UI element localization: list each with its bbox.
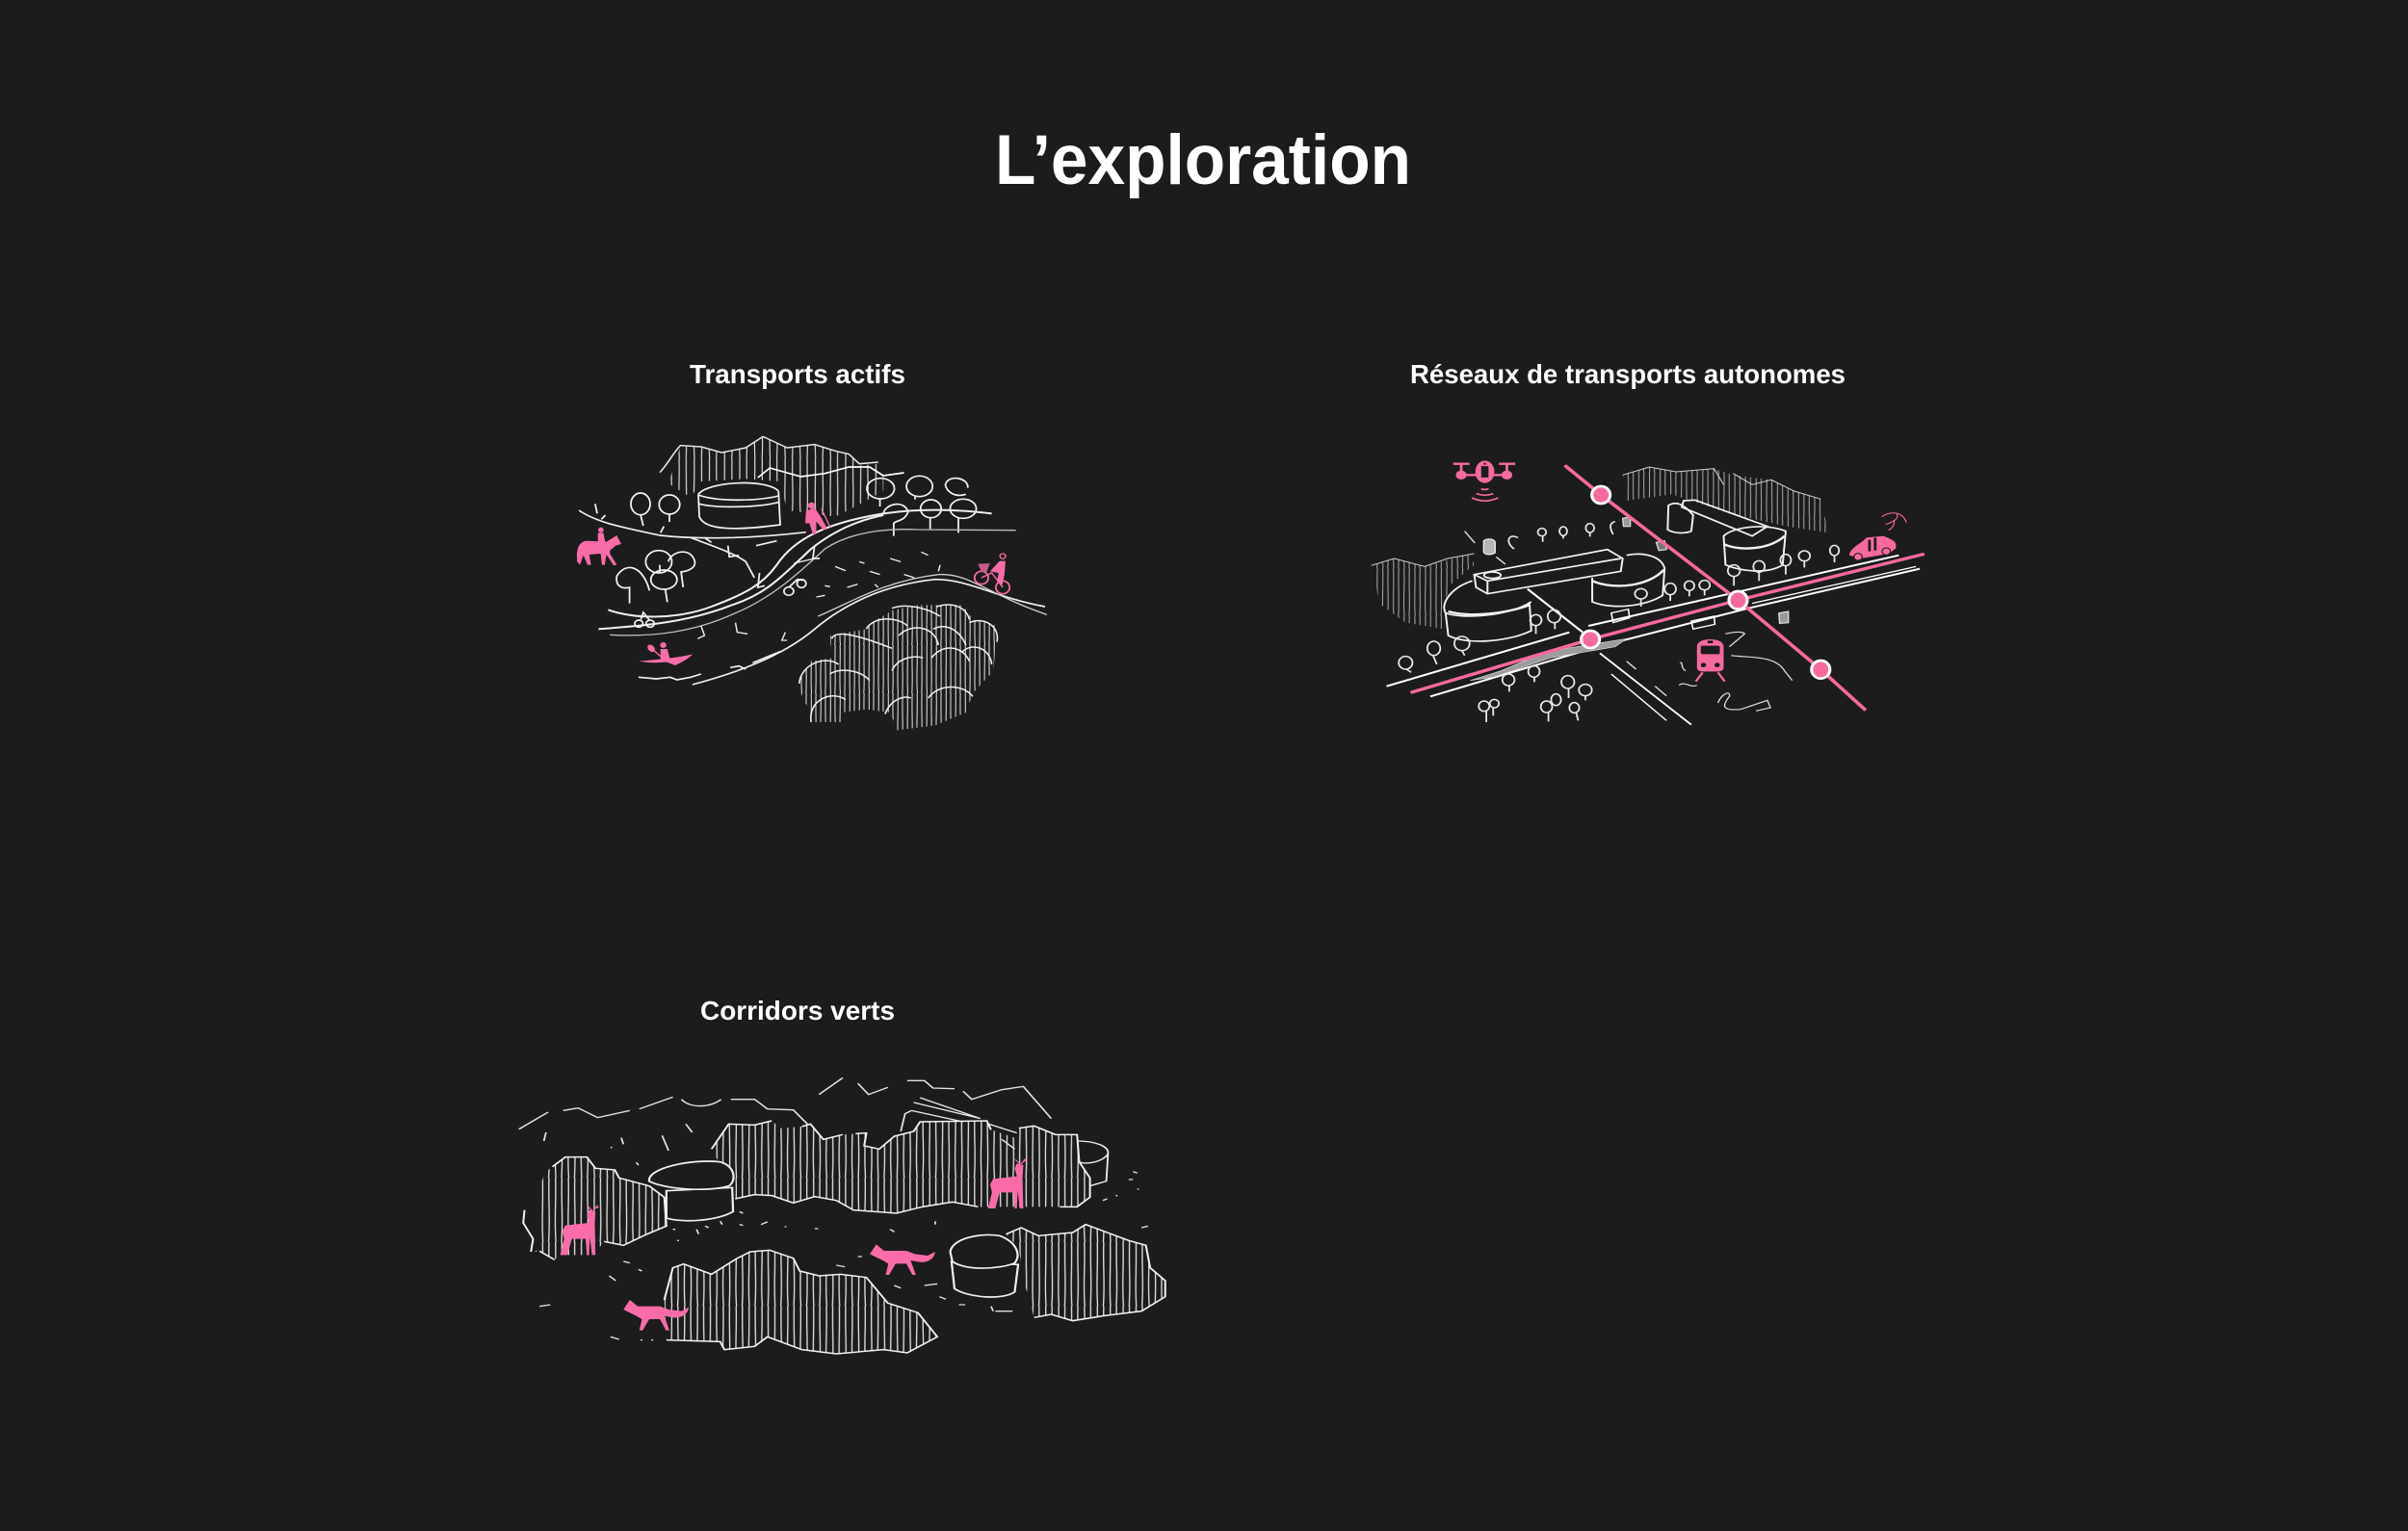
icon: passenger drone <box>1453 460 1515 501</box>
forest <box>799 605 997 730</box>
back hills hatching <box>1372 467 1828 629</box>
hills hatching <box>660 436 904 517</box>
icon: kayak <box>639 642 693 665</box>
tree block: top centre <box>712 1121 1090 1213</box>
tree block: bottom centre <box>665 1250 937 1354</box>
heading: Transports actifs: Transports actifs <box>690 359 905 389</box>
icon: horse rider <box>577 528 621 565</box>
icon: autonomous car <box>1849 513 1906 560</box>
tank building <box>698 483 780 529</box>
station nodes <box>1582 486 1830 679</box>
heading: Corridors verts: Corridors verts <box>700 996 895 1025</box>
trees <box>1399 522 1839 722</box>
illustration: Réseaux de transports autonomes <box>1372 460 1924 725</box>
icon: fox bottom left <box>623 1300 689 1331</box>
scribbles and small kiosks <box>1465 517 1793 711</box>
distant ridge lines <box>519 1077 1051 1151</box>
title: L’exploration <box>995 121 1411 199</box>
icon: hiker <box>805 503 830 534</box>
heading: Réseaux de transports autonomes: Réseaux de transports autonomes <box>1410 359 1845 389</box>
icon: fox centre <box>870 1244 935 1275</box>
illustration: Corridors verts <box>519 1077 1165 1354</box>
transit lines <box>1410 465 1924 711</box>
scattered vegetation marks <box>539 1148 1148 1340</box>
tanks <box>649 1141 1108 1297</box>
icon: cyclist <box>975 554 1009 594</box>
buildings and bridges <box>1444 500 1786 641</box>
icon: deer right <box>988 1158 1027 1208</box>
icon: deer left <box>561 1206 599 1255</box>
roads and paths <box>579 504 1047 685</box>
illustration: Transports actifs <box>577 436 1047 730</box>
icon: train <box>1696 639 1725 682</box>
tree block: left <box>523 1157 667 1259</box>
roads <box>1387 556 1920 725</box>
tree block: right <box>1007 1225 1165 1321</box>
trees <box>616 476 977 604</box>
